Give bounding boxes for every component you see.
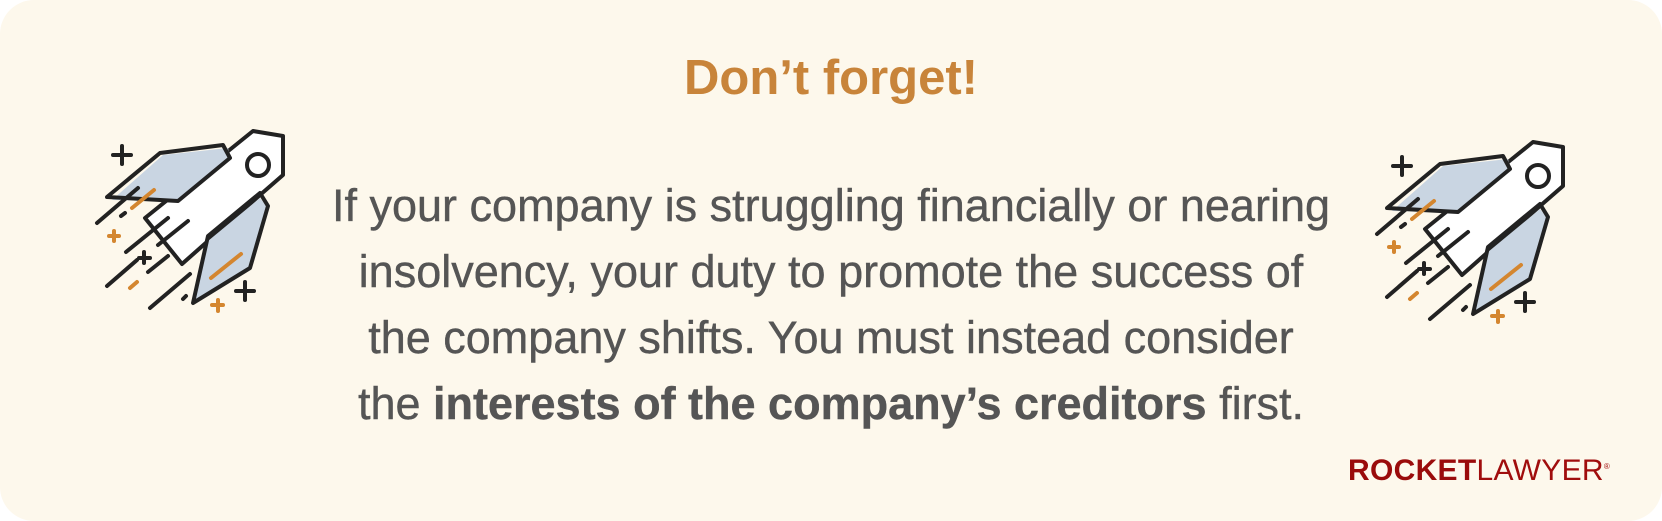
logo: ROCKETLAWYER® [1348,454,1610,487]
body text: If your company is struggling financially or nearing [332,180,1330,231]
body text: the company shifts. You must instead consider [368,312,1294,363]
body text: the interests of the company’s creditors first. [358,378,1304,429]
body text [332,180,1330,429]
icon: rocket right [1374,140,1565,324]
title: Don’t forget! [684,51,978,105]
icon: rocket left [94,129,285,313]
body text: insolvency, your duty to promote the success of [359,246,1303,297]
